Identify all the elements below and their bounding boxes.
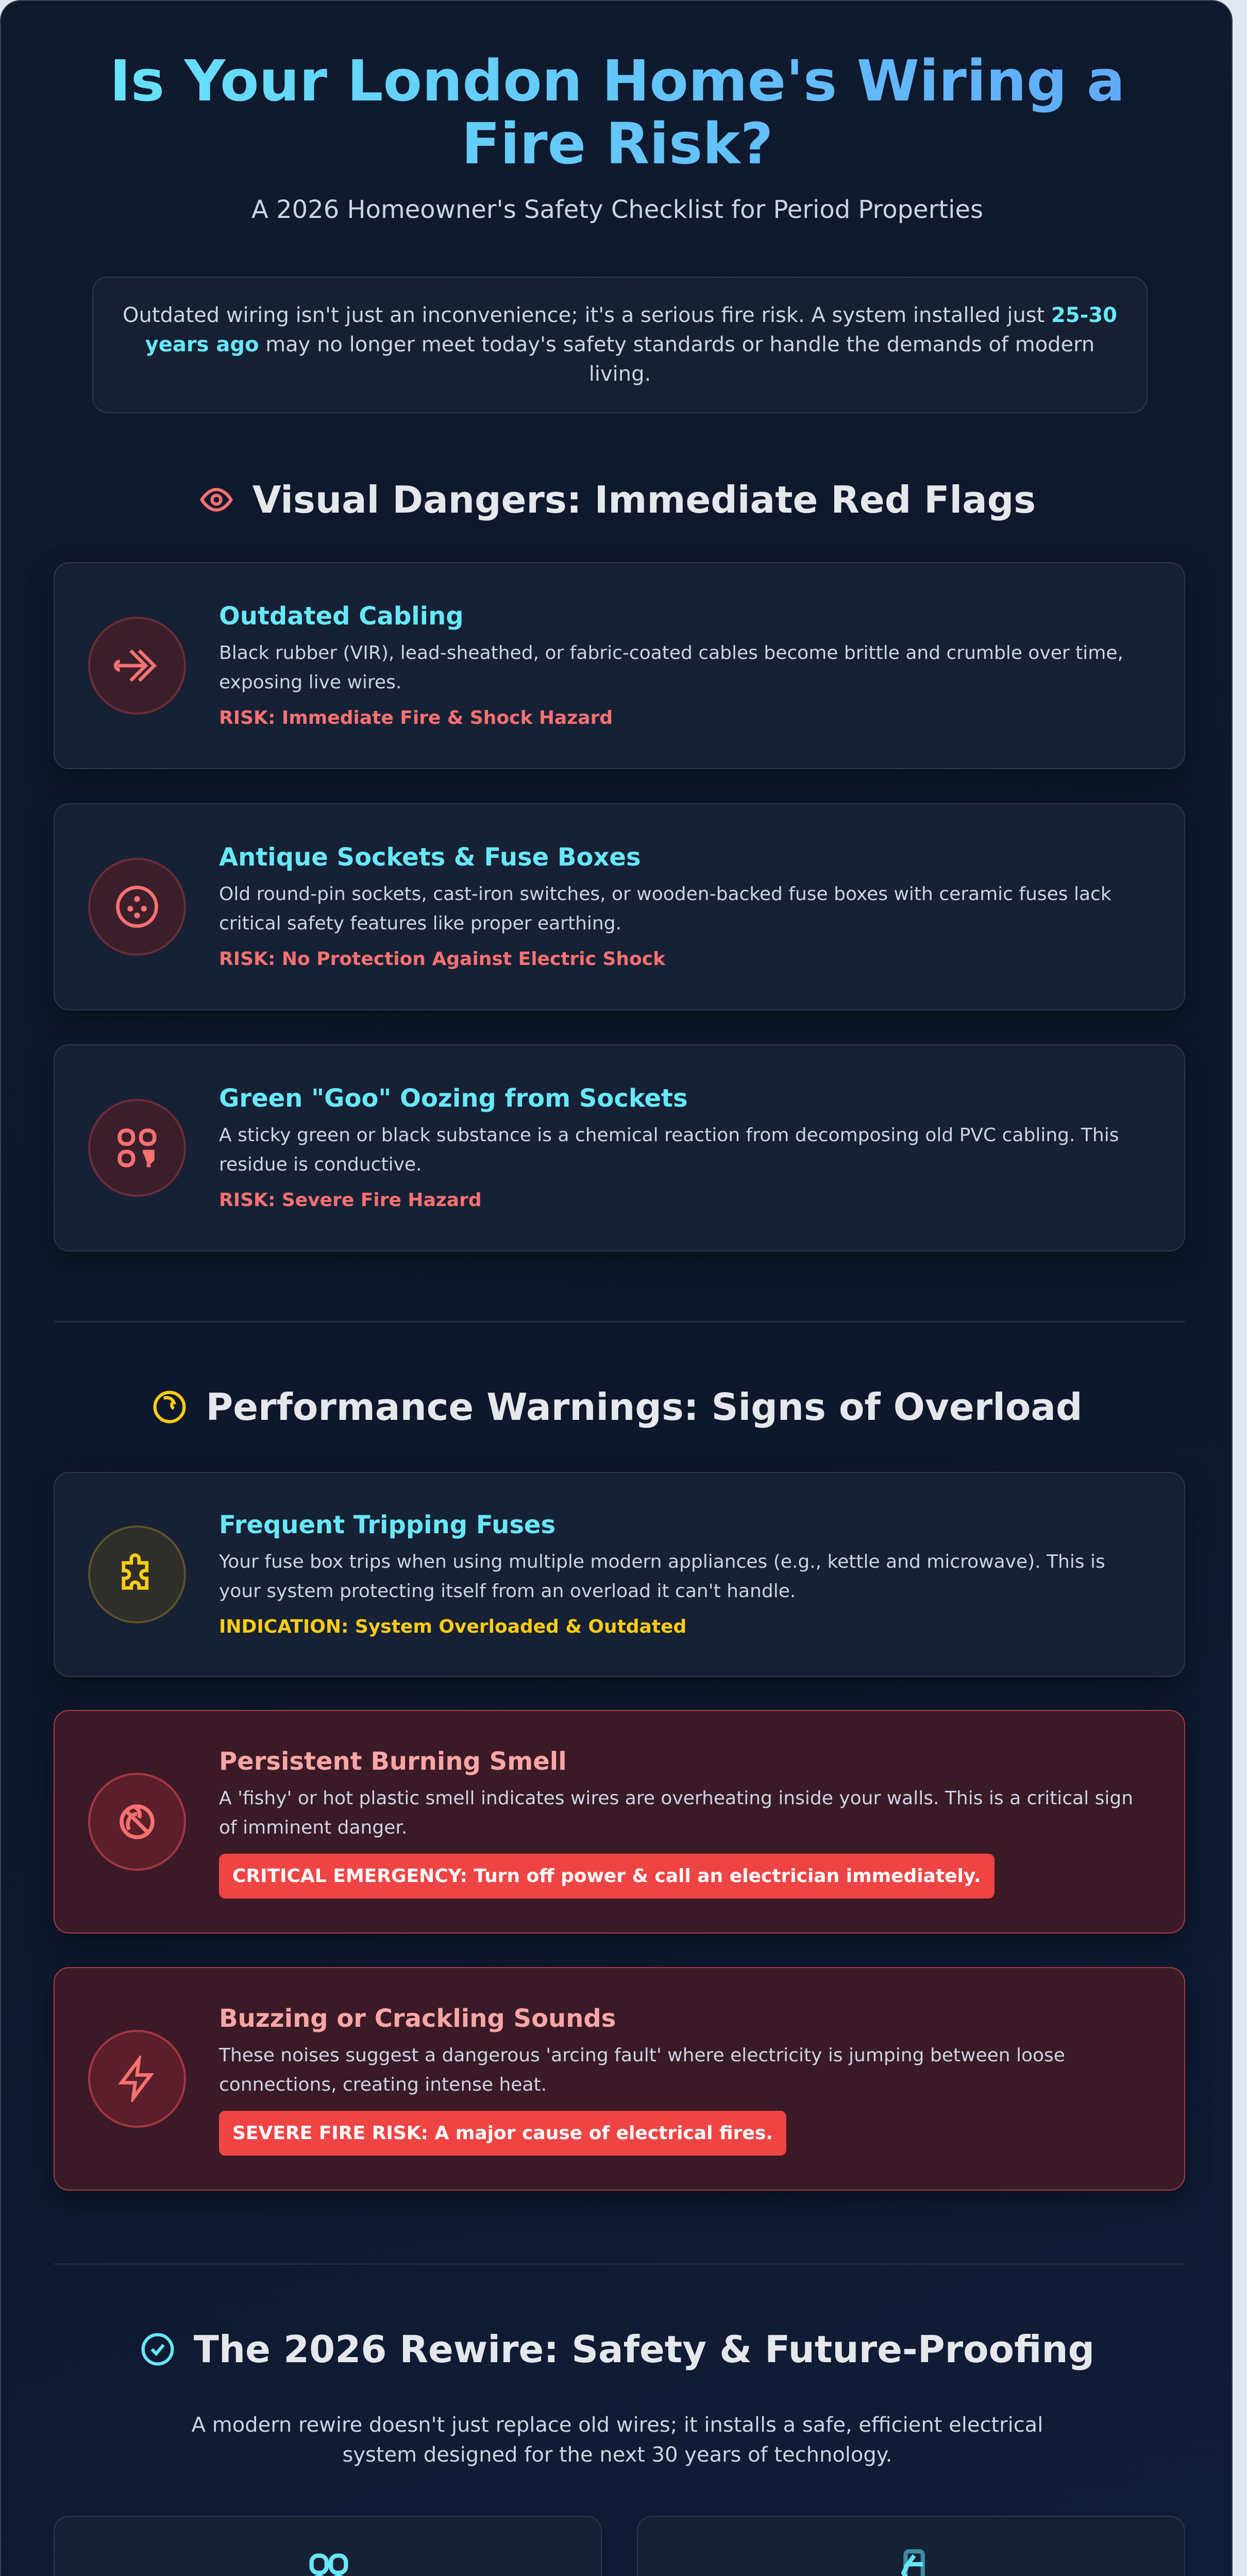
card: antique sockets: Antique Sockets & Fuse Boxes (219, 843, 641, 872)
card: green goo (54, 1044, 1185, 1251)
title: Fire Risk? (462, 111, 773, 177)
icon: socket (88, 858, 186, 956)
card: frequent tripping: INDICATION: System Overloaded & Outdated (219, 1616, 686, 1637)
card: antique sockets (54, 803, 1185, 1010)
section heading: performance warnings: Performance Warnings: Signs of Overload (206, 1385, 1083, 1429)
rewire intro: A modern rewire doesn't just replace old wires; it installs a safe, efficient electrical system designed for the next 30 years of technology. (192, 2413, 1043, 2467)
card: outdated cabling: Outdated Cabling (219, 602, 464, 631)
card: antique sockets: Old round-pin sockets, cast-iron switches, or wooden-backed fuse boxes with ceramic fuses lack critical safety features like proper earthing. (219, 884, 1111, 934)
card: frequent tripping: Frequent Tripping Fuses (219, 1511, 555, 1539)
card: green goo: RISK: Severe Fire Hazard (219, 1190, 482, 1211)
card: frequent tripping: Your fuse box trips when using multiple modern appliances (e.g., kettle and microwave). This is your system protecting itself from an overload it can't handle. (219, 1551, 1105, 1602)
icon: lightning (88, 2030, 186, 2128)
intro callout: Outdated wiring isn't just an inconvenience; it's a serious fire risk. A system installed just 25-30 years ago may no longer meet today's safety standards or handle the demands of modern living. (123, 303, 1117, 386)
feature: high-load circuits (637, 2516, 1185, 2576)
card: burning smell: A 'fishy' or hot plastic smell indicates wires are overheating inside your walls. This is a critical sign of imminent danger. (219, 1788, 1133, 1838)
icon: puzzle (88, 1526, 186, 1623)
card: buzzing: Buzzing or Crackling Sounds (219, 2004, 616, 2033)
card: outdated cabling (54, 562, 1185, 769)
card: outdated cabling: RISK: Immediate Fire & Shock Hazard (219, 707, 613, 728)
card: frequent tripping (54, 1472, 1185, 1677)
card: burning smell: Persistent Burning Smell (219, 1747, 567, 1775)
icon: smell (88, 1773, 186, 1871)
title: Is Your London Home's Wiring a (110, 48, 1125, 114)
card: buzzing: These noises suggest a dangerous 'arcing fault' where electricity is jumping between loose connections, creating intense heat. (219, 2044, 1065, 2095)
icon: goo (88, 1099, 186, 1197)
subtitle: A 2026 Homeowner's Safety Checklist for Period Properties (251, 195, 983, 224)
icon: grid (309, 2553, 348, 2576)
section heading: visual dangers: Visual Dangers: Immediate Red Flags (252, 478, 1036, 521)
icon: circuit (901, 2549, 925, 2576)
title (1, 49, 1234, 175)
card: buzzing: SEVERE FIRE RISK: A major cause of electrical fires. (232, 2123, 773, 2143)
card: burning smell: CRITICAL EMERGENCY: Turn off power & call an electrician immediately. (232, 1865, 981, 1887)
card: green goo: Green "Goo" Oozing from Sockets (219, 1084, 688, 1113)
card: buzzing (54, 1967, 1185, 2191)
section heading: 2026 rewire: The 2026 Rewire: Safety & Future-Proofing (194, 2328, 1094, 2371)
card: outdated cabling: Black rubber (VIR), lead-sheathed, or fabric-coated cables become brittle and crumble over time, exposing live wires. (219, 642, 1123, 693)
card: burning smell (54, 1710, 1185, 1934)
card: green goo: A sticky green or black substance is a chemical reaction from decomposing old PVC cabling. This residue is conductive. (219, 1125, 1119, 1175)
feature: consumer unit (54, 2516, 602, 2576)
card: antique sockets: RISK: No Protection Against Electric Shock (219, 948, 665, 970)
icon: cable (88, 617, 186, 715)
intro callout (92, 277, 1148, 413)
